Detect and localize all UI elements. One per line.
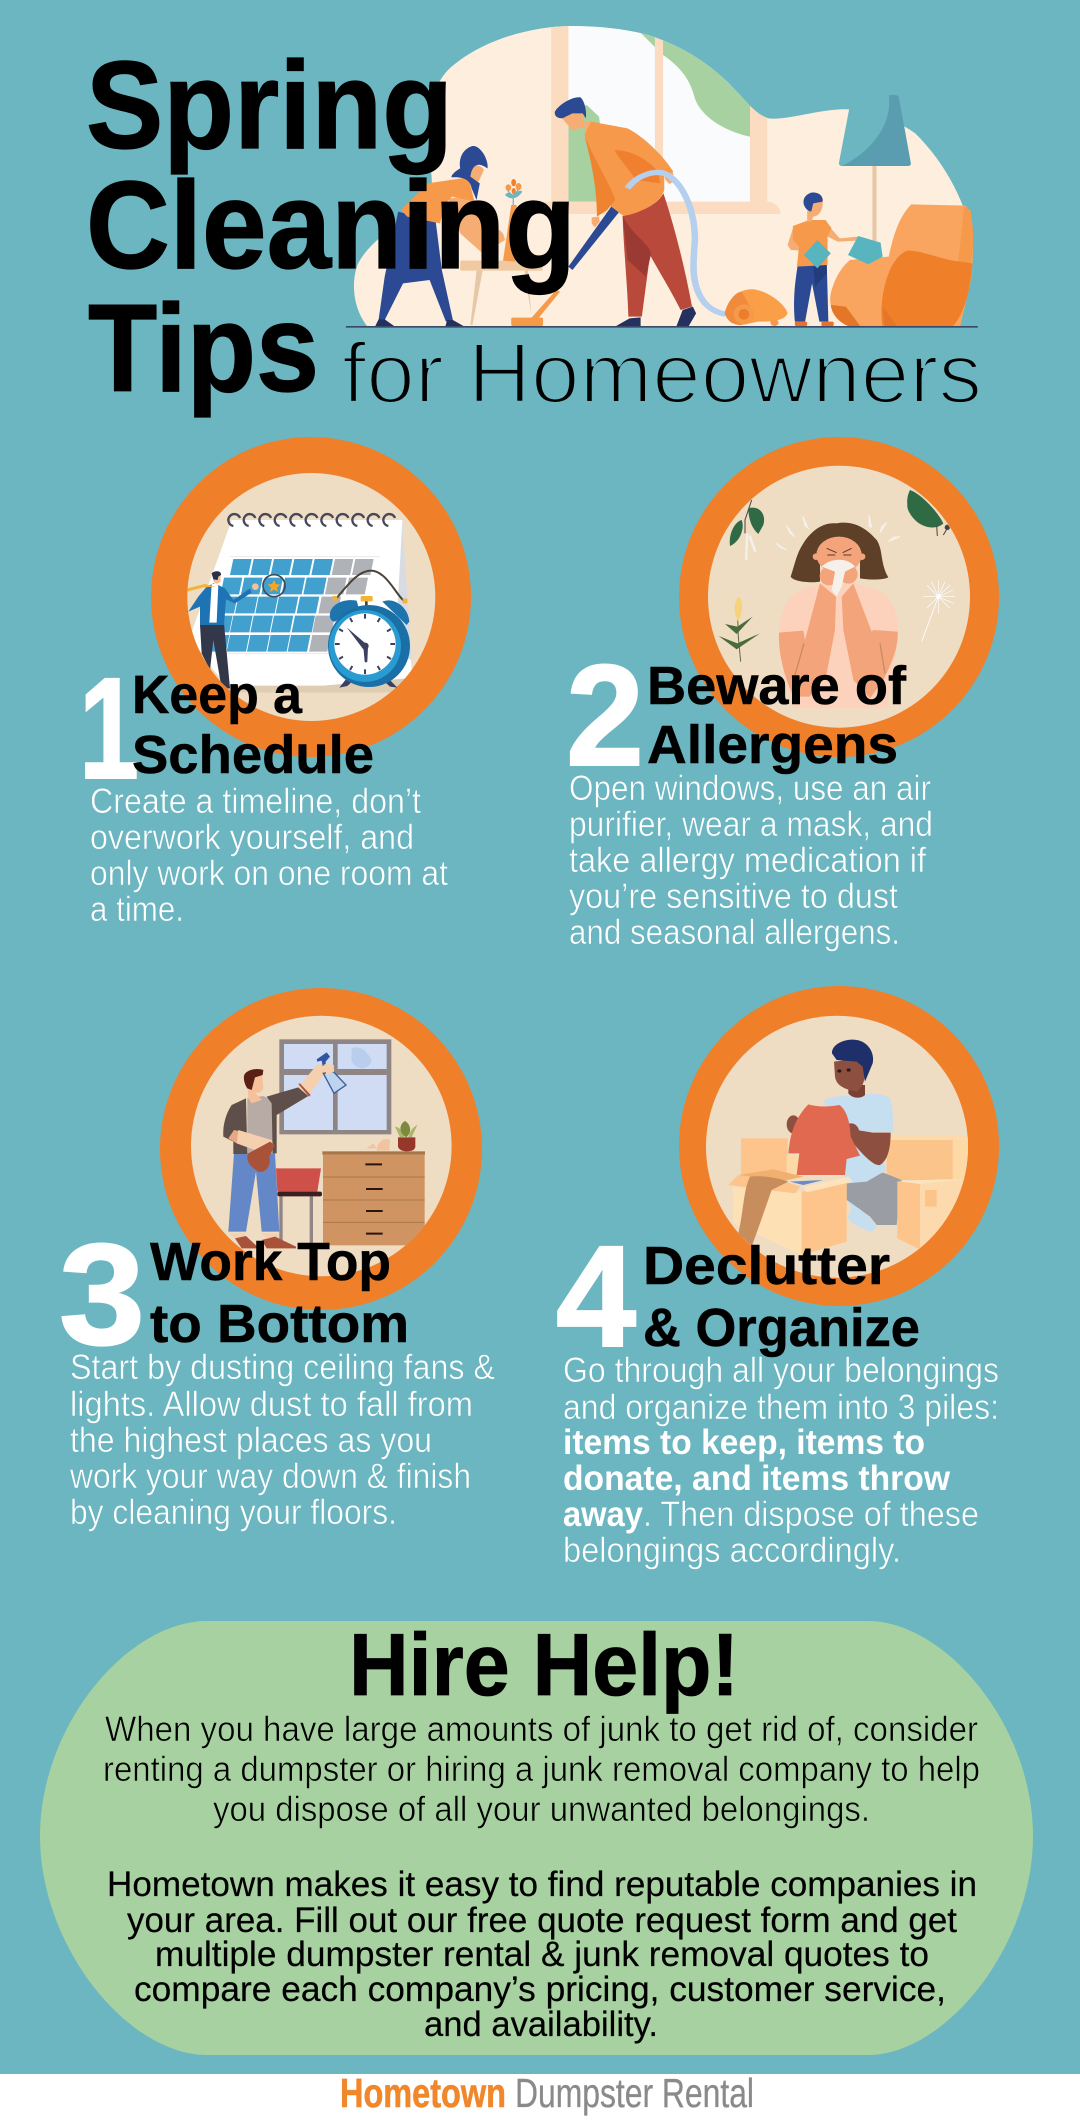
paragraph: hometown offer: compare each company’s pricing, customer service, — [134, 1970, 946, 2009]
heading: hire help: Hire Help! — [349, 1615, 739, 1714]
description 2 — [569, 769, 933, 952]
description 1: Create a timeline, don’t — [90, 782, 421, 821]
orange ring — [160, 988, 482, 1310]
woman dusting — [375, 146, 505, 326]
paragraph: hometown offer: Hometown makes it easy to find reputable companies in — [107, 1865, 977, 1904]
number 1: 1 — [79, 648, 139, 809]
right box — [897, 1179, 965, 1249]
paragraph: hometown offer: your area. Fill out our free quote request form and get — [127, 1901, 957, 1940]
description 3: Start by dusting ceiling fans & — [70, 1348, 495, 1387]
basin and stool — [276, 1168, 322, 1246]
description 3: by cleaning your floors. — [70, 1493, 397, 1532]
title: Tips — [88, 280, 319, 418]
businessman — [187, 571, 259, 688]
inner circle — [708, 466, 970, 728]
boy dusting cushions — [788, 193, 858, 326]
title: Spring — [86, 37, 453, 175]
description 4: Go through all your belongings — [563, 1351, 999, 1390]
heading 3: Work Top — [150, 1232, 391, 1292]
subtitle: for Homeowners — [342, 326, 982, 422]
description 2: and seasonal allergens. — [569, 913, 900, 952]
panel: tip 3 work top to bottom — [59, 988, 495, 1532]
footer bar — [0, 2070, 1080, 2128]
heading 2: Beware of — [647, 656, 907, 716]
logo: hometown dumpster rental: Hometown — [340, 2070, 506, 2116]
paragraph: when to hire: renting a dumpster or hiring a junk removal company to help — [103, 1750, 980, 1789]
heading 2: Allergens — [647, 715, 898, 775]
illustration: family cleaning a living room — [346, 20, 978, 328]
number 4: 4 — [556, 1216, 636, 1377]
panel: tip 2 beware of allergens — [566, 437, 999, 952]
man vacuuming — [555, 97, 696, 327]
oak leaves — [907, 490, 950, 536]
description 4: items to keep, items to — [563, 1423, 925, 1462]
title: Cleaning — [86, 157, 576, 295]
paragraph: when to hire: When you have large amounts of junk to get rid of, consider — [105, 1710, 978, 1749]
title — [86, 37, 576, 418]
heading 3 — [150, 1232, 409, 1354]
floor lamp — [839, 94, 911, 241]
alarm clock — [328, 571, 410, 688]
flowering plant — [719, 597, 760, 662]
description 4: and organize them into 3 piles: — [563, 1388, 999, 1427]
description 2: take allergy medication if — [569, 841, 926, 880]
description 4: belongings accordingly. — [563, 1531, 901, 1570]
vacuum hose — [628, 172, 726, 314]
illustration: calendar, businessman, alarm clock — [187, 514, 412, 692]
window — [279, 1039, 391, 1134]
description 4: away — [563, 1495, 643, 1534]
illustration: man sorting clothes among boxes — [728, 1040, 969, 1255]
paragraph: hometown offer: and availability. — [424, 2005, 658, 2044]
woman — [779, 523, 898, 708]
open box with clothes — [728, 1169, 853, 1255]
description 1: overwork yourself, and — [90, 818, 414, 857]
armchair — [830, 204, 973, 326]
description 4: . Then dispose of these — [643, 1495, 979, 1534]
green background shape — [40, 1621, 1033, 2055]
paragraph: when to hire: you dispose of all your unwanted belongings. — [213, 1790, 870, 1829]
back boxes — [741, 1135, 969, 1180]
potted plant — [395, 1121, 417, 1151]
dandelion — [922, 580, 955, 642]
description 2: purifier, wear a mask, and — [569, 805, 933, 844]
heading 1 — [132, 665, 374, 785]
description 3 — [69, 1348, 495, 1532]
floor line — [346, 326, 978, 328]
number 3: 3 — [59, 1214, 145, 1375]
illustration: man cleaning window — [223, 1039, 425, 1248]
heading 4: & Organize — [643, 1298, 920, 1358]
heading 4: Declutter — [643, 1236, 890, 1296]
heading 4 — [643, 1236, 920, 1358]
description 4 — [563, 1351, 999, 1570]
panel: tip 4 declutter and organize — [556, 986, 999, 1570]
paragraph: hometown offer — [107, 1865, 977, 2044]
vacuum pole and nozzle — [511, 187, 632, 326]
description 1: only work on one room at — [90, 854, 448, 893]
inner circle — [191, 1016, 452, 1276]
spray bottle — [317, 1052, 346, 1093]
inner circle — [187, 473, 435, 721]
birch leaves — [730, 500, 764, 560]
vacuum cleaner — [725, 289, 788, 326]
circled star date — [263, 575, 285, 597]
panel: hire help — [40, 1615, 1033, 2055]
description 3: work your way down & finish — [69, 1457, 471, 1496]
logo: hometown dumpster rental: Dumpster Rental — [515, 2070, 754, 2116]
heading 1: Schedule — [132, 725, 374, 785]
shirt held up — [788, 1104, 860, 1175]
sneeze marks — [776, 515, 900, 550]
orange ring — [151, 437, 471, 757]
pillow — [848, 236, 883, 264]
description 3: the highest places as you — [70, 1421, 432, 1460]
inner circle — [706, 1016, 968, 1278]
table and vase — [460, 179, 543, 325]
room background blob — [354, 26, 973, 326]
description 4: donate, and items throw — [563, 1459, 951, 1498]
man — [223, 1063, 334, 1248]
orange ring — [679, 437, 999, 757]
description 3: lights. Allow dust to fall from — [70, 1385, 473, 1424]
logo: hometown dumpster rental — [340, 2070, 754, 2116]
description 1 — [90, 782, 448, 929]
number 2: 2 — [566, 635, 644, 796]
heading 2 — [647, 656, 907, 775]
calendar rings — [228, 514, 395, 526]
heading 1: Keep a — [132, 665, 303, 725]
panel: tip 1 keep a schedule — [79, 437, 471, 929]
window — [538, 20, 781, 214]
paragraph: when to hire — [103, 1710, 980, 1829]
heading 3: to Bottom — [150, 1294, 409, 1354]
orange ring — [679, 986, 999, 1306]
illustration: woman sneezing with plants — [719, 490, 955, 708]
description 2: you’re sensitive to dust — [569, 877, 898, 916]
description 1: a time. — [90, 890, 184, 929]
man seated — [787, 1040, 902, 1232]
paragraph: hometown offer: multiple dumpster rental & junk removal quotes to — [155, 1935, 929, 1974]
dresser — [322, 1151, 425, 1245]
description 2: Open windows, use an air — [569, 769, 931, 808]
